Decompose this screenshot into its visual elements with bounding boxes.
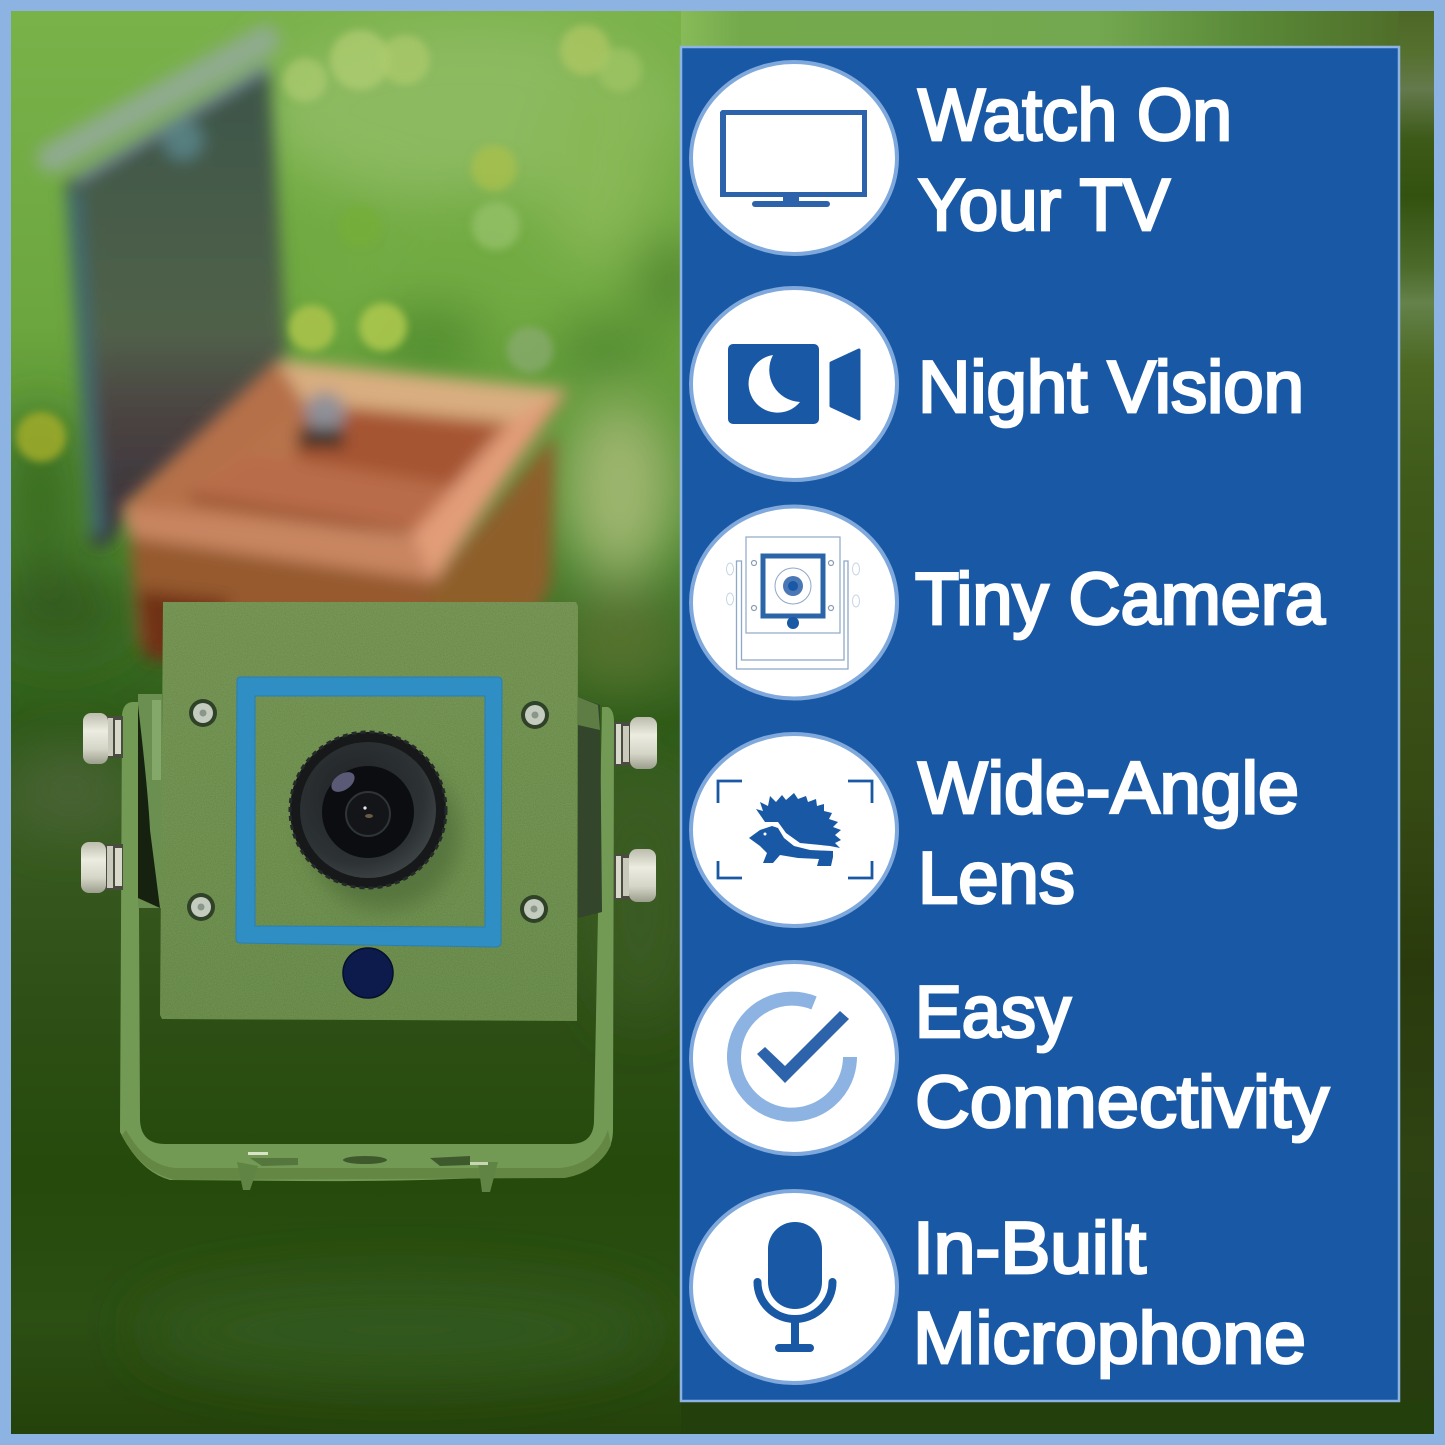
bird box orange planter <box>121 360 568 660</box>
text: Easy Connectivity: Connectivity <box>915 1062 1330 1143</box>
icon: night video camera <box>728 344 859 424</box>
text: In-Built Microphone: In-Built <box>913 1208 1146 1289</box>
text: Watch On Your TV <box>918 75 1232 246</box>
feature panel <box>681 47 1399 1401</box>
camera body <box>160 602 578 1021</box>
green wildlife camera <box>81 602 657 1192</box>
icon: check mark ring <box>734 999 850 1115</box>
indicator light <box>343 948 393 998</box>
icon: television <box>720 110 867 207</box>
text: In-Built Microphone <box>913 1208 1306 1379</box>
icon: hedgehog in viewfinder <box>718 781 872 878</box>
text: Tiny Camera: Tiny Camera <box>915 559 1325 640</box>
blue lens square <box>236 677 502 947</box>
text: Watch On Your TV: Your TV <box>918 165 1170 246</box>
text: Night Vision: Night Vision <box>918 347 1304 428</box>
text: Easy Connectivity <box>915 972 1330 1143</box>
body screws <box>187 699 549 923</box>
mounting knobs <box>81 713 657 902</box>
icon: camera outline <box>726 537 860 669</box>
feature: tiny camera <box>691 506 1325 698</box>
bokeh highlights <box>16 25 642 462</box>
camera bracket <box>120 694 614 1192</box>
text: Watch On Your TV: Watch On <box>918 75 1232 156</box>
feature: wide-angle lens <box>691 734 1299 926</box>
feature: in-built microphone <box>691 1191 1306 1383</box>
feature: night vision <box>691 288 1304 480</box>
camera lens <box>290 732 446 888</box>
lens shadow <box>308 758 460 910</box>
bird box back panel <box>52 40 286 546</box>
icon: microphone <box>758 1222 832 1348</box>
text: Easy Connectivity: Easy <box>915 972 1071 1053</box>
feature: watch on your TV <box>691 62 1232 254</box>
text: In-Built Microphone: Microphone <box>913 1298 1306 1379</box>
text: Wide-Angle Lens: Wide-Angle <box>918 748 1299 829</box>
text: Wide-Angle Lens <box>918 748 1299 919</box>
feature: easy connectivity <box>691 962 1330 1154</box>
text: Wide-Angle Lens: Lens <box>918 838 1075 919</box>
